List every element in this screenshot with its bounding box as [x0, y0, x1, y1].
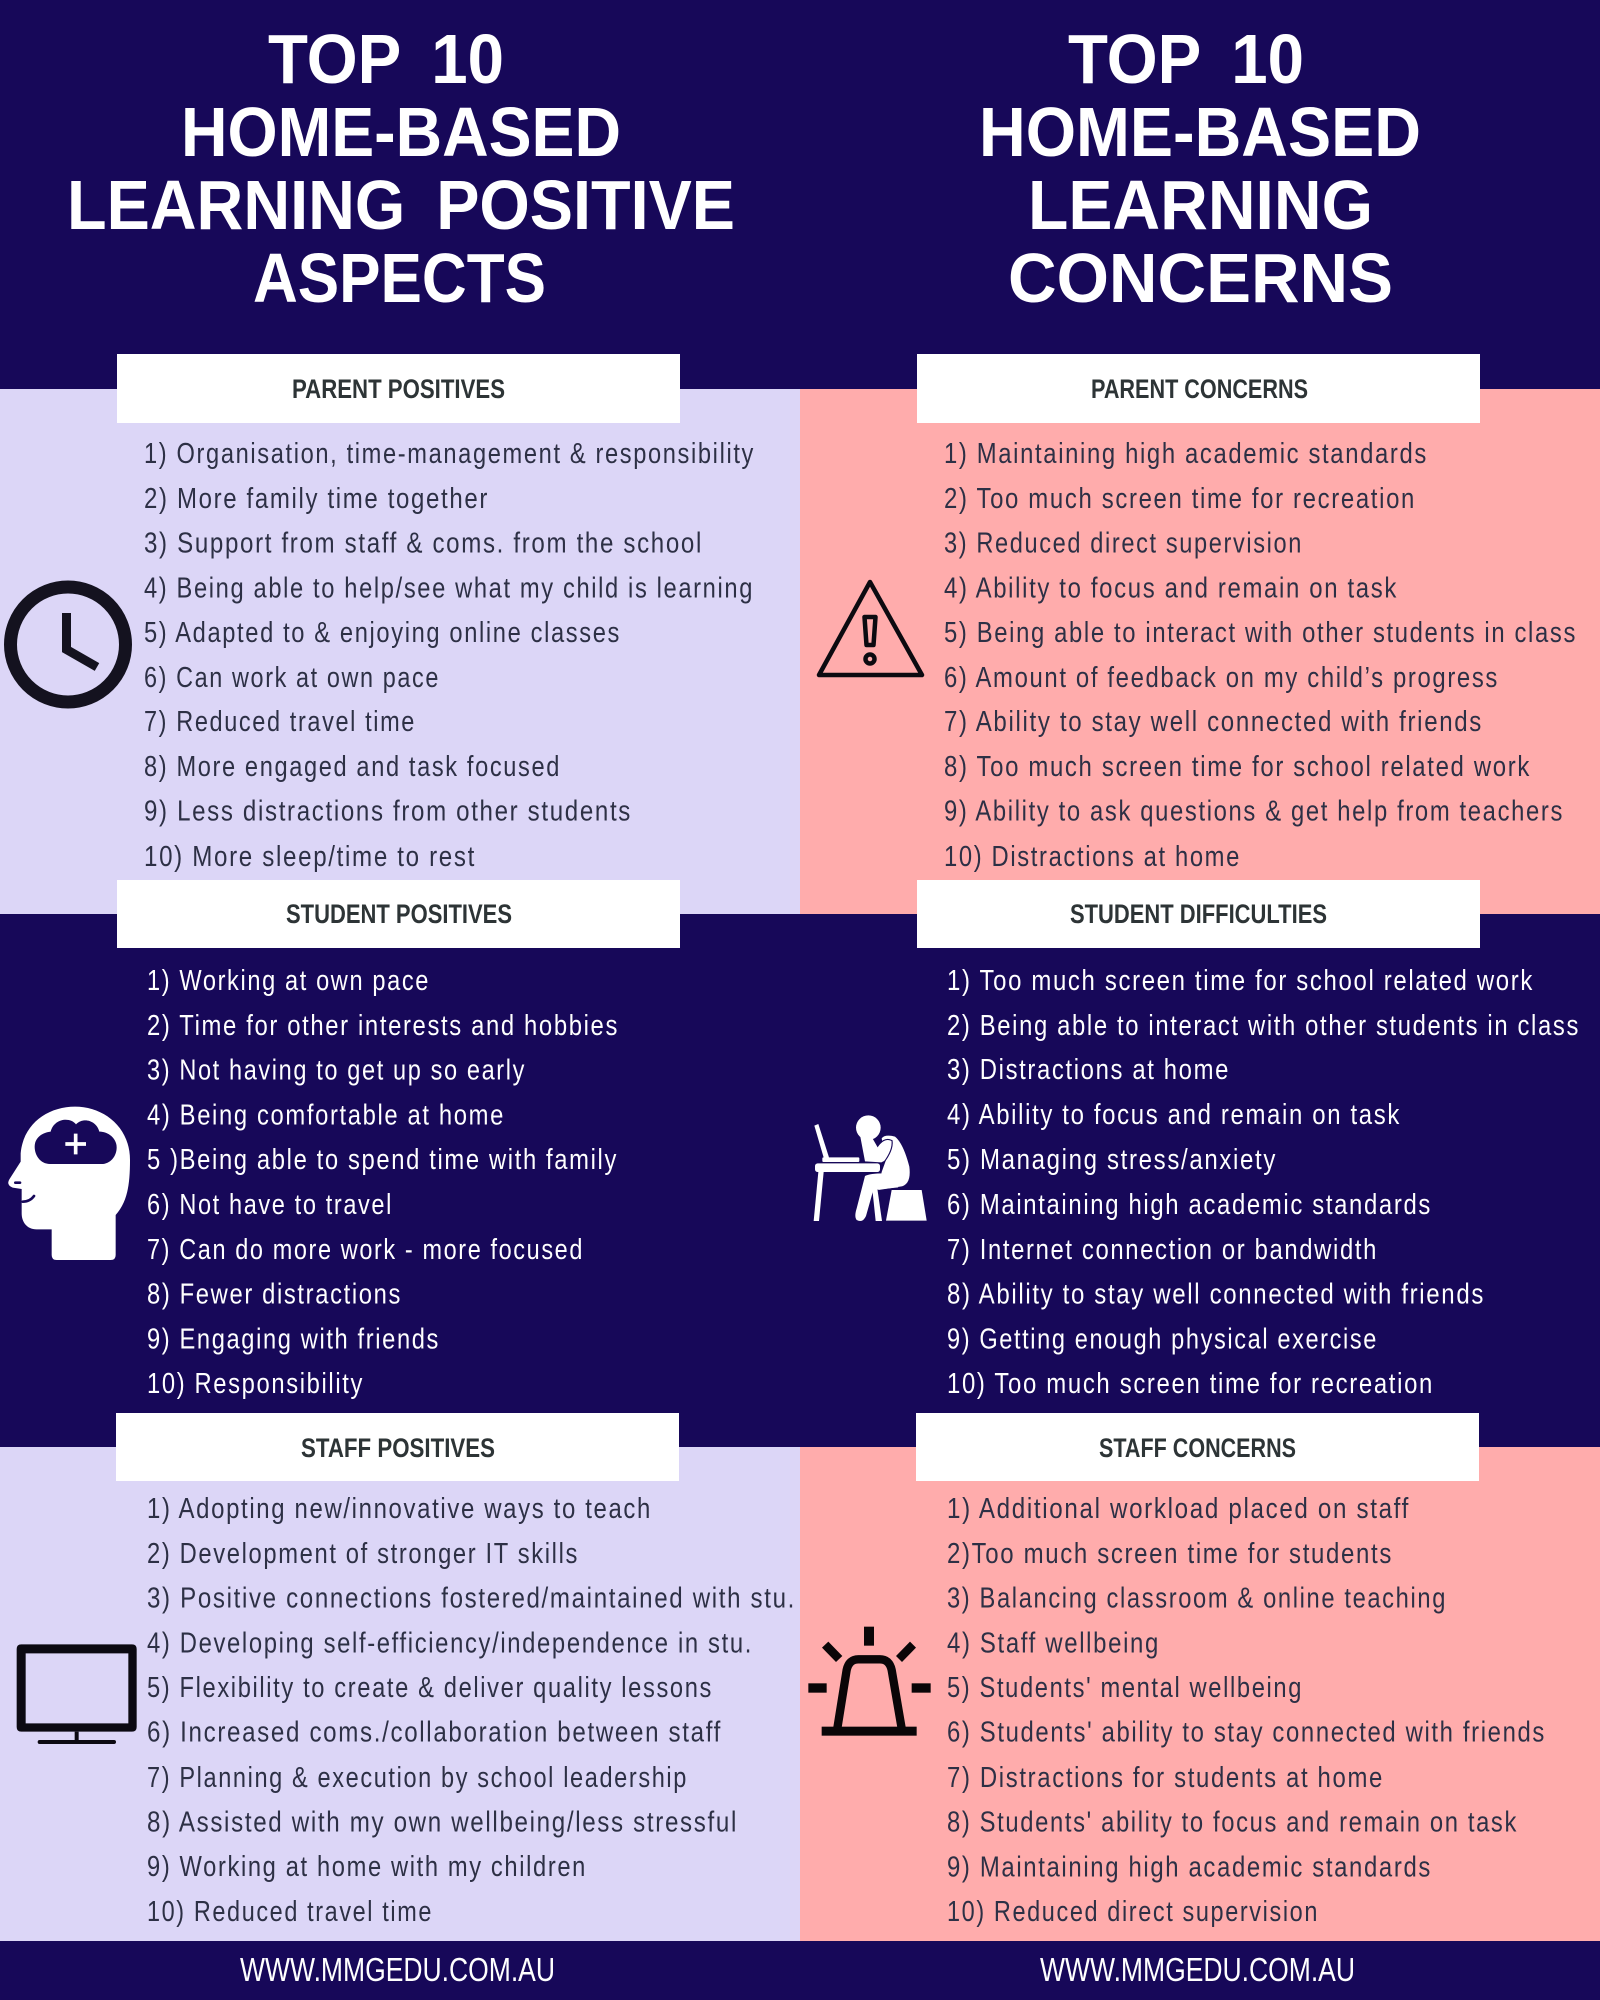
heading: student positives — [117, 880, 680, 948]
list: parent concerns: 7) Ability to stay well connected with friends — [944, 706, 1483, 738]
heading: student difficulties — [917, 880, 1480, 948]
list: staff positives: 5) Flexibility to create & deliver quality lessons — [147, 1672, 713, 1704]
list: staff positives: 7) Planning & execution by school leadership — [147, 1762, 688, 1794]
list: student positives: 3) Not having to get up so early — [147, 1055, 526, 1087]
title: concerns: TOP 10 — [1068, 20, 1304, 98]
list: student positives: 7) Can do more work - more focused — [147, 1234, 584, 1266]
list: parent positives: 7) Reduced travel time — [144, 706, 416, 738]
list: student difficulties: 10) Too much screen time for recreation — [947, 1368, 1434, 1400]
list: student positives: 8) Fewer distractions — [147, 1279, 402, 1311]
list: student difficulties: 7) Internet connection or bandwidth — [947, 1234, 1378, 1266]
list: staff positives: 4) Developing self-efficiency/independence in stu. — [147, 1627, 753, 1659]
icon: monitor — [17, 1644, 137, 1744]
list: parent positives: 3) Support from staff & coms. from the school — [144, 528, 703, 560]
heading: parent concerns: PARENT CONCERNS — [1091, 374, 1308, 404]
panel: staff concerns — [800, 1413, 1600, 1941]
heading: parent positives: PARENT POSITIVES — [292, 374, 505, 404]
list: staff concerns: 3) Balancing classroom & online teaching — [947, 1583, 1447, 1615]
list: student positives: 1) Working at own pace — [147, 965, 430, 997]
icon: alarm light — [808, 1627, 931, 1736]
list: student difficulties: 6) Maintaining high academic standards — [947, 1189, 1432, 1221]
list: staff positives: 9) Working at home with my children — [147, 1851, 587, 1883]
title: concerns: CONCERNS — [1008, 239, 1393, 317]
list: student difficulties: 9) Getting enough physical exercise — [947, 1323, 1378, 1355]
heading: student positives: STUDENT POSITIVES — [286, 899, 512, 929]
title: concerns: HOME-BASED — [979, 93, 1421, 171]
heading: staff positives: STAFF POSITIVES — [301, 1433, 495, 1463]
list: staff concerns: 5) Students' mental wellbeing — [947, 1672, 1303, 1704]
list: parent positives: 5) Adapted to & enjoying online classes — [144, 617, 621, 649]
list: student difficulties: 4) Ability to focus and remain on task — [947, 1099, 1401, 1131]
title: positive aspects: LEARNING POSITIVE — [67, 166, 735, 244]
list: staff concerns: 1) Additional workload placed on staff — [947, 1493, 1410, 1525]
panel: student difficulties — [800, 880, 1600, 1447]
list: student positives: 4) Being comfortable at home — [147, 1099, 505, 1131]
list: parent concerns: 4) Ability to focus and remain on task — [944, 572, 1398, 604]
footer: left website: WWW.MMGEDU.COM.AU — [240, 1951, 555, 1988]
list: student difficulties: 3) Distractions at home — [947, 1054, 1230, 1086]
title: positive aspects — [67, 20, 735, 317]
list: student positives: 2) Time for other interests and hobbies — [147, 1010, 619, 1042]
panel: parent positives — [0, 354, 800, 914]
list: parent concerns: 2) Too much screen time for recreation — [944, 483, 1416, 515]
list: parent positives — [144, 438, 755, 873]
icon: head with cloud — [8, 1107, 130, 1260]
title: positive aspects: ASPECTS — [253, 239, 546, 317]
list: staff concerns: 2)Too much screen time for students — [947, 1538, 1393, 1570]
list: staff positives: 8) Assisted with my own wellbeing/less stressful — [147, 1807, 738, 1839]
list: student positives: 6) Not have to travel — [147, 1189, 393, 1221]
list: staff positives: 10) Reduced travel time — [147, 1896, 433, 1928]
panel: parent concerns — [800, 354, 1600, 914]
icon: clock — [10, 587, 126, 702]
list: student positives: 10) Responsibility — [147, 1368, 364, 1400]
list: parent concerns: 6) Amount of feedback on my child’s progress — [944, 662, 1499, 694]
list: parent concerns: 3) Reduced direct supervision — [944, 528, 1303, 560]
heading: parent concerns — [917, 354, 1480, 423]
list: parent positives: 2) More family time together — [144, 483, 489, 515]
list: staff concerns: 7) Distractions for students at home — [947, 1762, 1384, 1794]
title: positive aspects: TOP 10 — [268, 20, 504, 98]
list: parent positives: 8) More engaged and task focused — [144, 751, 561, 783]
list: parent positives: 1) Organisation, time-management & responsibility — [144, 438, 755, 470]
list: parent positives: 4) Being able to help/see what my child is learning — [144, 572, 754, 604]
title: positive aspects: HOME-BASED — [181, 93, 621, 171]
list: parent positives: 10) More sleep/time to rest — [144, 841, 476, 873]
list: student difficulties: 5) Managing stress/anxiety — [947, 1144, 1277, 1176]
list: staff concerns: 4) Staff wellbeing — [947, 1627, 1160, 1659]
list: staff positives — [147, 1493, 796, 1928]
list: staff concerns: 9) Maintaining high academic standards — [947, 1851, 1432, 1883]
list: staff positives: 6) Increased coms./collaboration between staff — [147, 1716, 722, 1748]
list: student difficulties — [947, 965, 1580, 1400]
list: staff concerns: 10) Reduced direct supervision — [947, 1896, 1319, 1928]
list: parent concerns — [944, 438, 1577, 873]
list: student difficulties: 8) Ability to stay well connected with friends — [947, 1279, 1485, 1311]
list: staff positives: 2) Development of stronger IT skills — [147, 1538, 579, 1570]
title: concerns — [979, 20, 1421, 317]
list: student positives — [147, 965, 619, 1400]
list: parent positives: 9) Less distractions from other students — [144, 796, 632, 828]
list: staff concerns — [947, 1493, 1546, 1928]
footer: right website: WWW.MMGEDU.COM.AU — [1040, 1951, 1355, 1988]
icon: stressed student at laptop — [814, 1115, 927, 1221]
list: student positives: 5 )Being able to spend time with family — [147, 1144, 618, 1176]
list: parent concerns: 1) Maintaining high academic standards — [944, 438, 1428, 470]
heading: student difficulties: STUDENT DIFFICULTIES — [1070, 899, 1327, 929]
panel: staff positives — [0, 1413, 800, 1941]
list: student positives: 9) Engaging with friends — [147, 1323, 440, 1355]
panel: student positives — [0, 880, 800, 1447]
list: staff positives: 3) Positive connections fostered/maintained with stu. — [147, 1583, 796, 1615]
heading: staff positives — [116, 1413, 679, 1481]
title: concerns: LEARNING — [1028, 166, 1373, 244]
heading: parent positives — [117, 354, 680, 423]
list: parent positives: 6) Can work at own pace — [144, 662, 440, 694]
heading: staff concerns — [916, 1413, 1479, 1481]
icon: warning triangle — [819, 582, 922, 675]
heading: staff concerns: STAFF CONCERNS — [1099, 1433, 1296, 1463]
list: staff positives: 1) Adopting new/innovative ways to teach — [147, 1493, 652, 1525]
list: parent concerns: 10) Distractions at home — [944, 841, 1241, 873]
